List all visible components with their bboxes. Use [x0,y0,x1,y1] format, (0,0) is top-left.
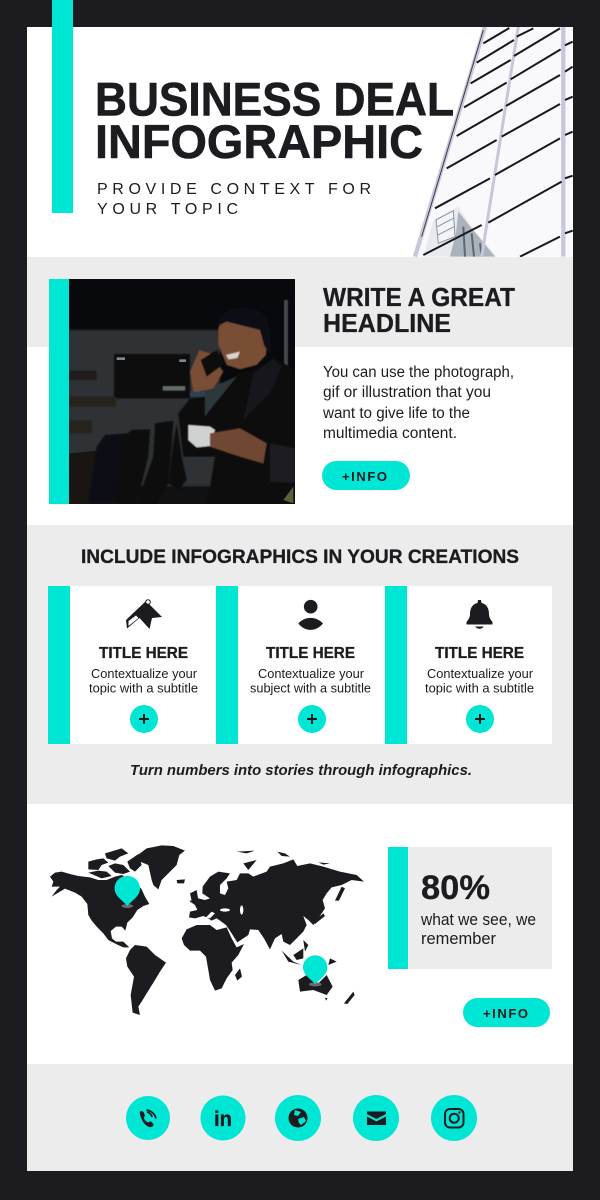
icon: flag [126,600,162,629]
body text: multimedia content. [323,425,457,442]
stat panel: what we see, we [420,911,536,929]
panel: footer [27,1064,573,1171]
photo accent bar [49,279,69,504]
panel: headline band [27,257,573,347]
card 1: TITLE HERE [99,645,188,662]
plus button [130,705,158,733]
card 1: Contextualize your [91,666,198,681]
stat panel: 80% [421,869,490,907]
icon: linkedin [200,1096,246,1140]
stat panel [388,847,552,969]
map pin: north america [115,876,140,908]
icon: phone [126,1096,170,1140]
button: info: +INFO [342,469,387,484]
world map [50,845,364,1015]
headline [323,282,515,338]
icon: person [298,600,323,630]
section heading: INCLUDE INFOGRAPHICS IN YOUR CREATIONS [81,547,519,568]
photo: businessman on phone [60,279,296,507]
card 2 [216,586,385,744]
subtitle: PROVIDE CONTEXT FOR [97,181,371,198]
button: info [463,998,550,1027]
plus button [466,705,494,733]
headline: HEADLINE [323,308,451,338]
plus button [298,705,326,733]
title: BUSINESS DEAL [95,72,454,126]
card 3: Contextualize your [427,666,534,681]
subtitle [97,181,371,218]
card 3: TITLE HERE [435,645,524,662]
map pin: australia [303,955,327,986]
card 2: TITLE HERE [266,645,355,662]
icon: linkedin: in [214,1108,232,1131]
stat panel: remember [421,930,497,948]
icon: bell [466,600,492,629]
icon: globe [275,1095,321,1141]
button: info [322,461,410,490]
icon: mail [353,1095,399,1141]
subtitle: YOUR TOPIC [97,201,238,218]
icon: instagram [431,1095,477,1141]
body text: You can use the photograph, [323,364,514,381]
body text [322,364,514,442]
panel: infographics [27,525,573,804]
card 3 [385,586,552,744]
card 3: topic with a subtitle [425,680,534,696]
card 1 [48,586,216,744]
headline: WRITE A GREAT [323,282,515,312]
card 1: topic with a subtitle [89,680,198,696]
card 2: subject with a subtitle [250,680,371,696]
card 2: Contextualize your [258,666,365,681]
button: info: +INFO [483,1006,528,1021]
body text: gif or illustration that you [323,384,491,401]
photo: glass building [415,27,573,257]
tagline: Turn numbers into stories through infographics. [130,763,472,779]
header accent bar [52,0,73,213]
title: INFOGRAPHIC [95,115,423,168]
title [95,72,454,168]
body text: want to give life to the [322,405,470,422]
